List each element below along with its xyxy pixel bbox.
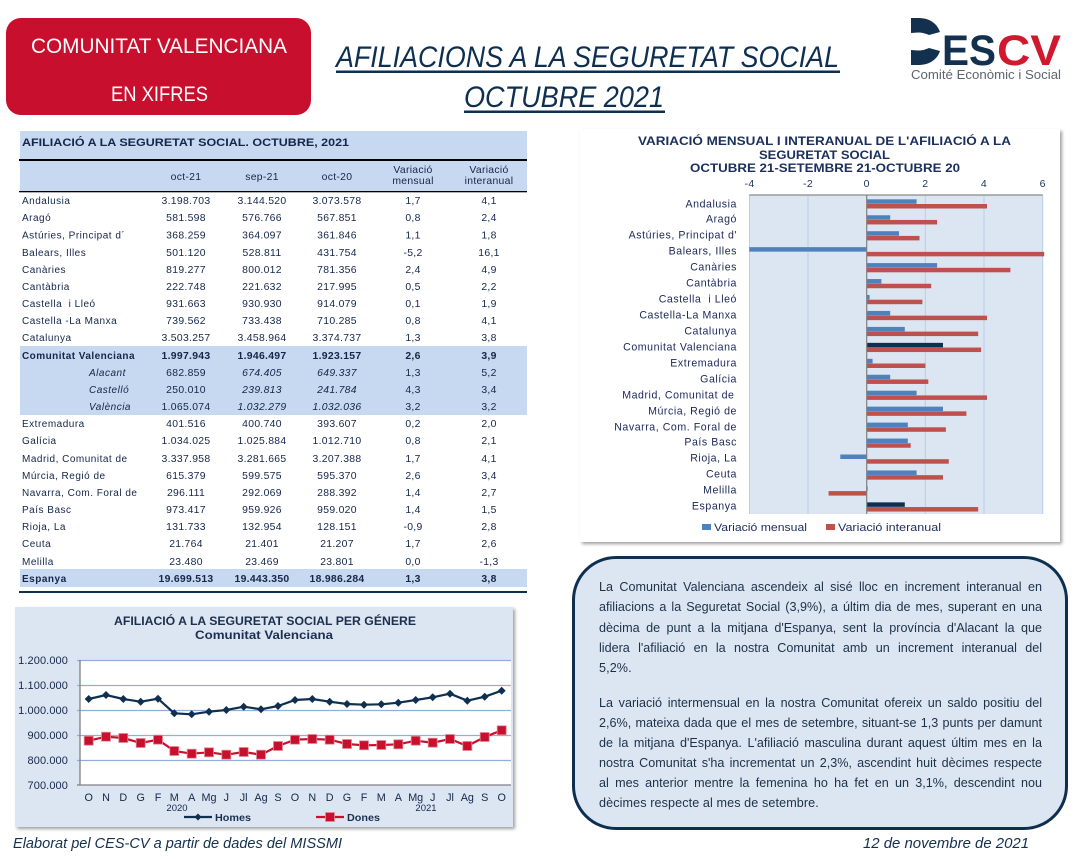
row: Madrid: [22, 454, 497, 465]
bar chart category labels: [614, 198, 737, 512]
bar chart category labels: Cantàbria: [686, 278, 737, 290]
plot area and gridlines: [77, 660, 511, 785]
row: Navarra: 296.111: [167, 488, 205, 499]
row: Navarra: Navarra, Com. Foral de: [22, 488, 137, 499]
table: affiliation by region: [19, 131, 527, 593]
line chart legend: [184, 812, 380, 824]
series: Dones: [84, 726, 506, 759]
text panel: commentary: [572, 556, 1068, 830]
x axis labels: J: [224, 792, 229, 804]
highlighted band: Comunitat Valenciana and provinces: [20, 346, 527, 415]
bar chart legend: Variació interanual: [838, 522, 941, 534]
text panel: commentary: La variació intermensual en la nostra Comunitat ofereix un saldo positiu del: [599, 696, 1042, 710]
row: Castella-La Manxa: 733.438: [242, 316, 282, 327]
row: Extremadura: [22, 419, 497, 430]
row: Alacant: 674.405: [242, 368, 282, 379]
row: Extremadura: 2,0: [481, 419, 497, 430]
row: Catalunya: 3.503.257: [162, 333, 210, 344]
row: Catalunya: Catalunya: [22, 333, 72, 344]
y axis labels: [18, 655, 68, 792]
line chart legend: Dones: [347, 812, 380, 824]
row: Extremadura: 400.740: [242, 419, 282, 430]
bar chart category labels: Castella i Lleó: [659, 294, 737, 306]
x axis labels: G: [343, 792, 351, 804]
table column headers: sep-21: [245, 172, 279, 183]
text panel: commentary: afiliacions a la Seguretat Social (3,9%), a últim dia de mes, superant en una: [599, 600, 1042, 614]
row: Melilla: Melilla: [22, 557, 54, 568]
text panel: commentary: dècima de punt a la mitjana d'Espanya, sent la província d'Alacant la que: [599, 621, 1042, 635]
line chart title: [114, 615, 416, 642]
x axis labels: O: [84, 792, 93, 804]
header badge: Comunitat Valenciana en xifres: EN XIFRES: [111, 83, 208, 106]
row: Melilla: -1,3: [479, 557, 499, 568]
row: País Basc: 973.417: [166, 505, 206, 516]
table column headers: oct-20: [322, 172, 352, 183]
y axis labels: 1.200.000: [18, 655, 68, 667]
row: Astúries: 364.097: [242, 230, 282, 242]
row: Madrid: 1,7: [405, 454, 421, 465]
text panel: commentary: nostra Comunitat s'ha incrementat un 2,3%, ascendint huit dècimes respecte: [599, 756, 1042, 770]
row: Andalusia: 4,1: [481, 196, 497, 207]
row: Rioja: 2,8: [481, 522, 497, 533]
row: Castelló: 241.784: [316, 385, 357, 396]
row: Castella i Lleó: 930.930: [242, 299, 282, 310]
text panel: commentary: lidera l'afiliació en la nostra Comunitat amb un increment interanual del: [599, 641, 1042, 655]
row: Múrcia: 2,6: [405, 471, 421, 482]
x axis labels: F: [155, 792, 162, 804]
bar chart category labels: Andalusia: [686, 198, 737, 210]
row: Cantàbria: 221.632: [242, 282, 282, 293]
row: Extremadura: Extremadura: [22, 419, 85, 430]
bar chart category labels: Aragó: [706, 214, 737, 226]
row: Castella-La Manxa: 4,1: [481, 316, 497, 327]
row: Múrcia: [22, 471, 497, 482]
row: Castella i Lleó: 931.663: [166, 299, 206, 310]
row: País Basc: 1,5: [481, 505, 497, 516]
row: Madrid: 3.207.388: [313, 454, 361, 465]
paragraph 2: [599, 696, 1042, 810]
text panel: commentary: al mes anterior mentre la femenina ho ha fet en un 3,1%, descendint nou: [599, 776, 1042, 790]
text panel: commentary: 2,6%, mateixa dada que el mes de setembre, situant-se 1,3 punts per damunt: [599, 716, 1042, 730]
row: Extremadura: 0,2: [405, 419, 421, 430]
row: Aragó: [22, 213, 497, 224]
row: Rioja: 131.733: [166, 522, 206, 533]
row: Comunitat Valenciana: 3,9: [481, 351, 497, 362]
row: Melilla: 23.801: [320, 557, 354, 568]
main title: [334, 41, 840, 114]
x axis labels: N: [102, 792, 110, 804]
x axis labels: M: [170, 792, 179, 804]
bar chart category labels: Rioja, La: [690, 452, 737, 464]
row: Madrid: 3.281.665: [238, 454, 286, 465]
row: Astúries: Astúries, Principat d´: [22, 230, 125, 242]
row: Ceuta: 21.207: [320, 539, 354, 550]
table title band: [20, 131, 527, 159]
row: Múrcia: Múrcia, Regió de: [22, 471, 106, 482]
bar chart category labels: Astúries, Principat d': [629, 230, 737, 242]
row: Castella-La Manxa: [22, 316, 497, 327]
row: País Basc: 959.926: [242, 505, 282, 516]
x axis labels: O: [497, 792, 506, 804]
row: Galícia: 1.034.025: [162, 436, 210, 447]
row: Rioja: 132.954: [242, 522, 282, 533]
row: València: 1.032.279: [238, 402, 286, 413]
bar chart category labels: Múrcia, Regió de: [648, 406, 737, 418]
bar chart title: VARIACIÓ MENSUAL I INTERANUAL DE L'AFILIACIÓ A LA: [638, 135, 1011, 148]
row: Aragó: 2,4: [481, 213, 497, 224]
row: Balears: 16,1: [478, 248, 500, 259]
row: Balears: Balears, Illes: [22, 248, 86, 259]
table column headers: oct-21: [171, 172, 201, 183]
row: País Basc: [22, 505, 497, 516]
logo: CES-CV: [911, 18, 1061, 82]
row: Alacant: 1,3: [405, 368, 421, 379]
series: Homes: [85, 687, 506, 718]
row: Andalusia: 3.073.578: [313, 196, 361, 207]
row: València: 1.032.036: [313, 402, 361, 413]
panel: monthly and yearly variation bar chart: [580, 129, 1060, 542]
bar chart zero axis: [866, 195, 868, 514]
row: Ceuta: Ceuta: [22, 539, 51, 550]
bars: monthly variation: [749, 199, 943, 507]
bar chart category labels: Madrid, Comunitat de: [622, 390, 734, 402]
row: Ceuta: 21.764: [169, 539, 203, 550]
bar chart axis labels: -4: [745, 178, 754, 190]
row: Canàries: 781.356: [317, 265, 357, 276]
row: Cantàbria: [22, 282, 497, 293]
row: Aragó: Aragó: [22, 213, 51, 224]
row: Espanya: 18.986.284: [309, 574, 365, 585]
row: Múrcia: 599.575: [242, 471, 282, 482]
row: Castelló: [89, 385, 497, 396]
row: València: 3,2: [405, 402, 421, 413]
row: Canàries: 4,9: [481, 265, 497, 276]
x axis labels: Ag: [461, 792, 474, 804]
row: Ceuta: 2,6: [481, 539, 497, 550]
y axis labels: 700.000: [28, 780, 68, 792]
x axis labels: S: [481, 792, 488, 804]
x axis labels: D: [119, 792, 127, 804]
y axis labels: 1.000.000: [18, 705, 68, 717]
table column headers: mensual: [392, 176, 434, 187]
x axis labels: Ag: [254, 792, 268, 804]
bar chart axis labels: 4: [981, 178, 987, 190]
bar chart category labels: Melilla: [703, 484, 737, 496]
row: Madrid: Madrid, Comunitat de: [22, 454, 128, 465]
footer: date: 12 de novembre de 2021: [863, 835, 1029, 852]
row: Múrcia: 3,4: [481, 471, 497, 482]
paragraph 1: [599, 580, 1042, 675]
row: Navarra: 1,4: [405, 488, 421, 499]
bar chart title: [638, 135, 1011, 175]
panel: gender line chart: [15, 607, 513, 827]
main title: OCTUBRE 2021: [464, 81, 664, 114]
bar chart legend: [702, 522, 941, 534]
row: Aragó: 576.766: [242, 213, 282, 224]
row: Espanya: 3,8: [481, 574, 497, 585]
row: Espanya: 19.699.513: [158, 574, 214, 585]
bar chart axis labels: -2: [803, 178, 813, 190]
main title: AFILIACIONS A LA SEGURETAT SOCIAL: [334, 41, 839, 74]
row: Catalunya: 3.374.737: [313, 333, 361, 344]
text panel: commentary: 5,2%.: [599, 661, 632, 675]
row: Balears: 501.120: [166, 248, 206, 259]
y axis labels: 900.000: [28, 730, 68, 742]
row: València: València: [89, 402, 131, 413]
x axis labels: Jl: [446, 792, 454, 804]
row: País Basc: País Basc: [22, 505, 72, 516]
x axis labels: Jl: [240, 792, 248, 804]
row: Espanya: [19, 569, 527, 593]
row: Melilla: 0,0: [405, 557, 421, 568]
table column headers: Variació: [393, 165, 433, 176]
line chart title: AFILIACIÓ A LA SEGURETAT SOCIAL PER GÉNERE: [114, 615, 416, 628]
text panel: commentary: La Comunitat Valenciana ascendeix al sisé lloc en increment interanual en: [599, 580, 1042, 594]
row: Comunitat Valenciana: 1.946.497: [238, 351, 286, 362]
row: Balears: 431.754: [317, 248, 357, 259]
row: Castella-La Manxa: Castella -La Manxa: [22, 316, 117, 327]
text panel: commentary: de la mitjana d'Espanya. L'afiliació masculina durant aquest últim mes en la: [599, 736, 1042, 750]
row: Canàries: Canàries: [22, 265, 66, 276]
row: Cantàbria: 217.995: [317, 282, 357, 293]
row: Castelló: 239.813: [241, 385, 282, 396]
bar chart category labels: Comunitat Valenciana: [623, 342, 737, 354]
row: Cantàbria: Cantàbria: [22, 282, 70, 293]
row: Aragó: 0,8: [405, 213, 421, 224]
row: Ceuta: [22, 539, 497, 550]
row: Cantàbria: 0,5: [405, 282, 421, 293]
logo: CES-CV: CV: [997, 27, 1061, 75]
row: Galícia: [22, 436, 497, 447]
x axis labels: G: [136, 792, 145, 804]
row: Múrcia: 615.379: [166, 471, 206, 482]
row: Rioja: -0,9: [403, 522, 423, 533]
row: Balears: [22, 248, 500, 259]
row: Castelló: 250.010: [166, 385, 206, 396]
row: País Basc: 1,4: [405, 505, 421, 516]
row: Castella-La Manxa: 710.285: [317, 316, 357, 327]
x axis labels: Mg: [408, 792, 423, 804]
logo: CES-CV: Comité Econòmic i Social: [911, 67, 1061, 82]
row: València: 1.065.074: [162, 402, 210, 413]
row: Canàries: 2,4: [405, 265, 421, 276]
x axis labels: Mg: [202, 792, 216, 804]
x axis labels: D: [326, 792, 334, 804]
row: Astúries: 368.259: [166, 230, 206, 242]
bar chart category labels: Espanya: [692, 500, 737, 512]
row: Melilla: [22, 557, 499, 568]
row: València: 3,2: [481, 402, 497, 413]
x axis labels: 2021: [415, 803, 437, 814]
row: Castella i Lleó: [22, 299, 497, 310]
row: Melilla: 23.469: [245, 557, 279, 568]
x axis labels: M: [377, 792, 386, 804]
row: Comunitat Valenciana: [22, 351, 497, 362]
row: Melilla: 23.480: [169, 557, 203, 568]
row: Alacant: 5,2: [481, 368, 497, 379]
y axis labels: 800.000: [28, 755, 68, 767]
row: Castelló: 4,3: [405, 385, 421, 396]
row: Comunitat Valenciana: 2,6: [405, 351, 421, 362]
row: Espanya: Espanya: [22, 574, 67, 585]
row: Aragó: 581.598: [166, 213, 206, 224]
row: Catalunya: 3.458.964: [238, 333, 286, 344]
row: Navarra: 2,7: [481, 488, 497, 499]
row: Catalunya: 3,8: [481, 333, 497, 344]
row: Galícia: 1.012.710: [313, 436, 361, 447]
row: Andalusia: 1,7: [405, 196, 421, 207]
row: Galícia: 2,1: [481, 436, 497, 447]
bar chart category labels: Navarra, Com. Foral de: [614, 422, 737, 434]
x axis labels: N: [308, 792, 316, 804]
bar chart category labels: Ceuta: [706, 468, 737, 480]
row: Alacant: 649.337: [317, 368, 358, 379]
bar chart axis labels: 6: [1040, 178, 1046, 190]
row: Castella i Lleó: 0,1: [405, 299, 421, 310]
bar chart title: SEGURETAT SOCIAL: [759, 150, 890, 162]
row: Galícia: 0,8: [405, 436, 421, 447]
bar chart category labels: Canàries: [690, 262, 737, 274]
line chart legend: Homes: [215, 812, 251, 824]
x axis labels: S: [274, 792, 282, 804]
bar chart category labels: Castella-La Manxa: [639, 310, 737, 322]
header badge: Comunitat Valenciana en xifres: [6, 18, 311, 115]
bars: yearly variation: [829, 204, 1044, 512]
bar chart category labels: Balears, Illes: [669, 246, 737, 258]
x axis labels: 2020: [166, 803, 188, 814]
row: Cantàbria: 2,2: [481, 282, 497, 293]
row: Alacant: Alacant: [88, 368, 127, 379]
row: Canàries: 819.277: [166, 265, 206, 276]
row: Catalunya: [22, 333, 497, 344]
row: Extremadura: 401.516: [166, 419, 206, 430]
row: Alacant: [88, 368, 497, 379]
row: Rioja: Rioja, La: [22, 522, 66, 533]
table title band: AFILIACIÓ A LA SEGURETAT SOCIAL. OCTUBRE, 2021: [22, 136, 349, 149]
table column headers: [19, 159, 527, 192]
row: Espanya: 19.443.350: [234, 574, 290, 585]
bar chart axis labels: 0: [864, 178, 870, 190]
row: Andalusia: 3.144.520: [238, 196, 286, 207]
bar chart axis labels: 2: [922, 178, 928, 190]
x axis labels: [84, 792, 506, 814]
row: Castella-La Manxa: 0,8: [405, 316, 421, 327]
row: Castelló: Castelló: [89, 385, 129, 396]
row: Andalusia: Andalusia: [22, 196, 70, 207]
row: Castella i Lleó: 914.079: [317, 299, 357, 310]
bar chart plot area: [749, 195, 1043, 514]
bar chart legend: Variació mensual: [714, 522, 807, 534]
bar chart category labels: Galícia: [700, 374, 737, 386]
footer: source: Elaborat pel CES-CV a partir de dades del MISSMI: [13, 835, 342, 852]
bar chart category labels: País Basc: [684, 436, 737, 448]
row: Astúries: [22, 230, 497, 242]
row: Madrid: 4,1: [481, 454, 497, 465]
row: Rioja: [22, 522, 497, 533]
x axis labels: J: [430, 792, 435, 804]
row: València: [89, 402, 497, 413]
row: Castella i Lleó: Castella i Lleó: [22, 299, 96, 310]
row: Comunitat Valenciana: Comunitat Valenciana: [22, 351, 135, 362]
row: Astúries: 361.846: [317, 230, 357, 242]
row: Múrcia: 595.370: [317, 471, 357, 482]
row: Extremadura: 393.607: [317, 419, 357, 430]
table column headers: Variació: [469, 165, 509, 176]
row: Balears: -5,2: [403, 248, 423, 259]
row: Cantàbria: 222.748: [166, 282, 206, 293]
row: Andalusia: 3.198.703: [162, 196, 210, 207]
row: Aragó: 567.851: [317, 213, 357, 224]
row: Navarra: 292.069: [242, 488, 282, 499]
header badge: Comunitat Valenciana en xifres: COMUNITAT VALENCIANA: [31, 35, 287, 58]
row: Ceuta: 1,7: [405, 539, 421, 550]
row: Galícia: 1.025.884: [238, 436, 286, 447]
bar chart category labels: Catalunya: [684, 326, 737, 338]
row: Comunitat Valenciana: 1.923.157: [313, 351, 361, 362]
table column headers: interanual: [465, 176, 513, 187]
row: Balears: 528.811: [243, 248, 281, 259]
x axis labels: O: [291, 792, 299, 804]
row: Andalusia: [22, 196, 497, 207]
row: Espanya: 1,3: [405, 574, 421, 585]
row: Navarra: 288.392: [317, 488, 357, 499]
logo: CES-CV: ES: [942, 27, 996, 75]
bar chart axis labels: [745, 178, 1046, 190]
y axis labels: 1.100.000: [18, 680, 68, 692]
row: Comunitat Valenciana: 1.997.943: [162, 351, 210, 362]
row: Alacant: 682.859: [166, 368, 206, 379]
x axis labels: A: [188, 792, 196, 804]
row: Rioja: 128.151: [317, 522, 357, 533]
row: Canàries: [22, 265, 497, 276]
row: Catalunya: 1,3: [405, 333, 421, 344]
row: Ceuta: 21.401: [245, 539, 279, 550]
row: País Basc: 959.020: [317, 505, 357, 516]
x axis labels: F: [361, 792, 368, 804]
row: Castella-La Manxa: 739.562: [166, 316, 206, 327]
row: Astúries: 1,1: [405, 230, 421, 242]
row: Madrid: 3.337.958: [162, 454, 210, 465]
row: Castella i Lleó: 1,9: [481, 299, 497, 310]
x axis labels: A: [395, 792, 403, 804]
line chart title: Comunitat Valenciana: [195, 630, 334, 642]
bar chart title: OCTUBRE 21-SETEMBRE 21-OCTUBRE 20: [690, 163, 960, 175]
row: Canàries: 800.012: [242, 265, 282, 276]
text panel: commentary: dècimes respecte al mes de setembre.: [599, 796, 819, 810]
row: Galícia: Galícia: [22, 436, 57, 447]
row: Astúries: 1,8: [481, 230, 497, 242]
bar chart category labels: Extremadura: [670, 358, 737, 370]
row: Castelló: 3,4: [481, 385, 497, 396]
row: Navarra: [22, 488, 497, 499]
